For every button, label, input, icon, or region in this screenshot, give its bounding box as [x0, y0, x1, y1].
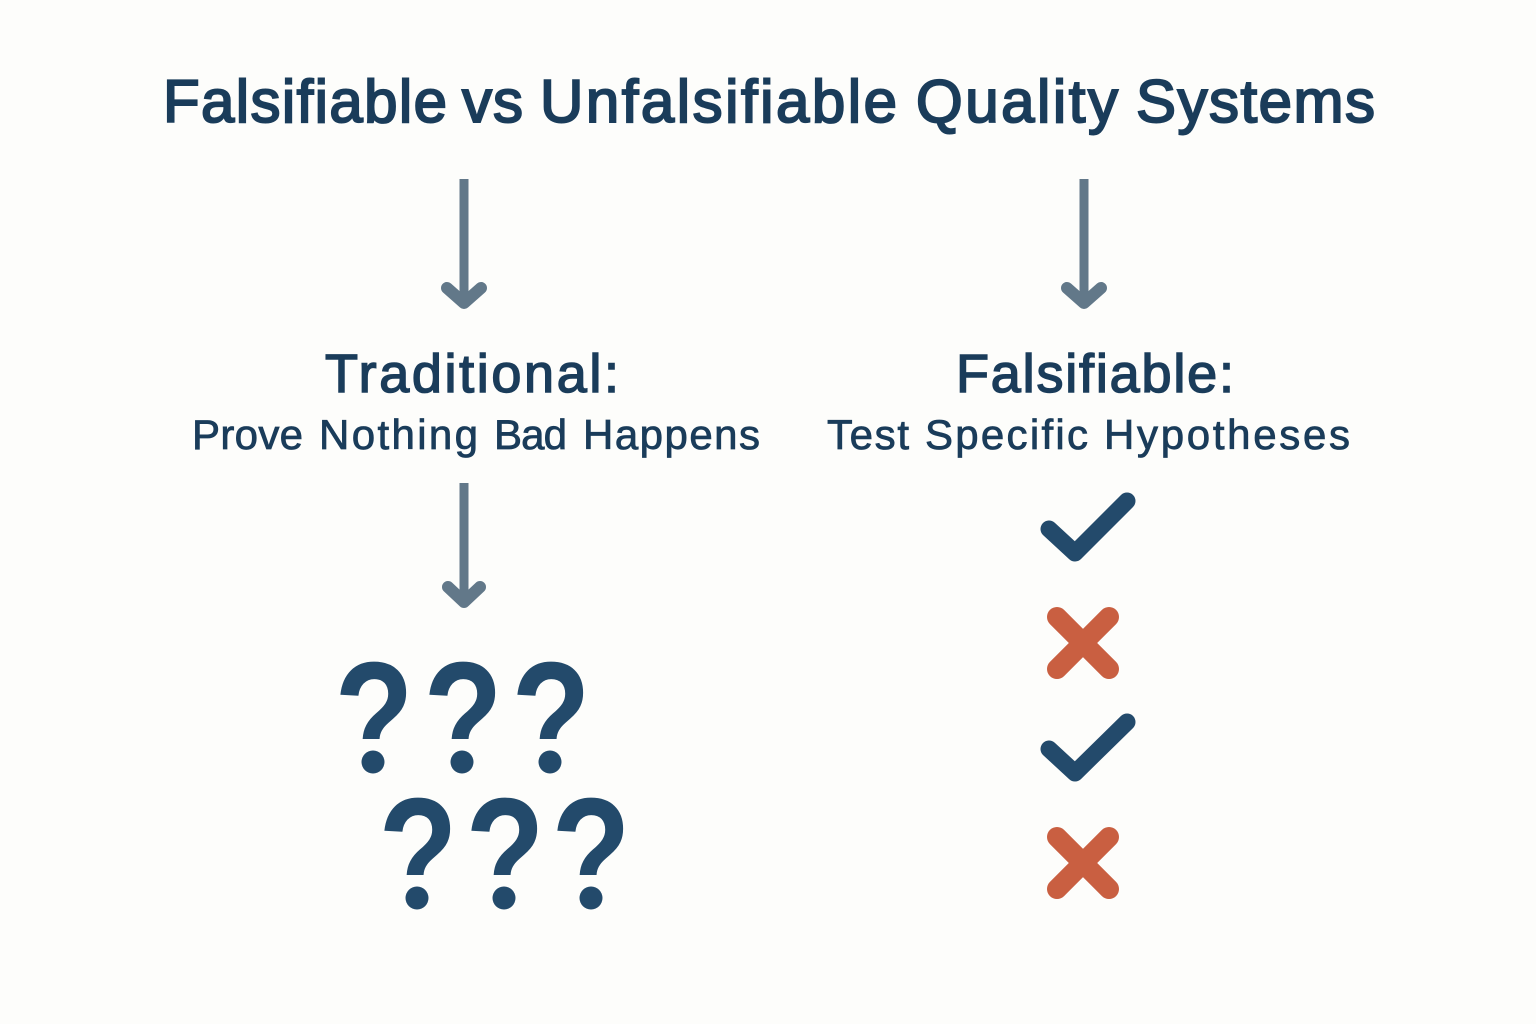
heading: falsifiable: Test [827, 411, 909, 458]
title: vs [462, 68, 523, 135]
icon: cross 1 [1057, 617, 1109, 669]
question marks [340, 662, 624, 910]
heading: traditional: Bad [494, 411, 567, 458]
title: Unfalsifiable [540, 68, 897, 135]
icon: check 2 [1049, 722, 1127, 773]
question marks: ? [551, 765, 631, 942]
arrow: traditional to question marks [448, 483, 480, 602]
heading: falsifiable [827, 344, 1350, 458]
heading: traditional: Nothing [319, 411, 478, 458]
question marks: ? [511, 629, 591, 806]
icon: cross 2 [1057, 837, 1109, 889]
heading: traditional: Traditional: [325, 344, 619, 404]
heading: traditional: Happens [583, 411, 760, 458]
question marks: ? [378, 765, 458, 942]
heading: falsifiable: Specific [925, 411, 1088, 458]
heading: traditional [192, 344, 760, 458]
question marks: ? [423, 629, 503, 806]
question marks: ? [334, 629, 414, 806]
title: Falsifiable [163, 68, 447, 135]
title: Systems [1136, 68, 1375, 135]
icon: check 1 [1049, 501, 1127, 553]
title: Quality [916, 68, 1118, 135]
arrow: title to falsifiable [1067, 179, 1101, 303]
heading: falsifiable: Falsifiable: [956, 344, 1234, 404]
arrow: title to traditional [447, 179, 481, 303]
heading: falsifiable: Hypotheses [1104, 411, 1350, 458]
heading: traditional: Prove [192, 411, 303, 458]
question marks: ? [465, 765, 545, 942]
